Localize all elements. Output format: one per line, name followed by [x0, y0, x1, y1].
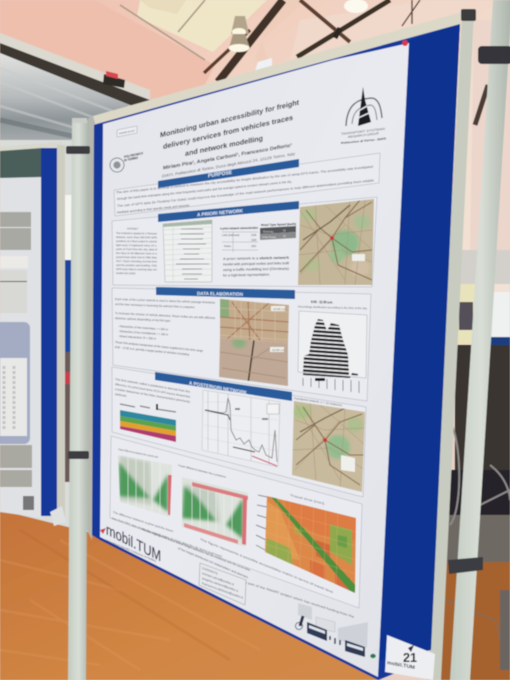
- line chart: speed profile: [202, 390, 280, 467]
- ceiling lamps: [228, 0, 368, 52]
- poster number label: mobil.TUM: [387, 660, 415, 671]
- results text: The figure represents a possible accessibility matrix in terms of travel time: [200, 537, 333, 594]
- acknowledgement text: This research is part of the SMART project which has received funding from the: [220, 572, 354, 619]
- background scene on the right: [440, 20, 510, 680]
- map: node detail bottom: 12:00 r:m: [272, 348, 285, 352]
- panel: purpose: feedback according to their specific needs and interests.: [117, 203, 190, 214]
- background: ceiling and wall: [0, 0, 510, 340]
- right frame bar of the board: [427, 14, 474, 680]
- mobil.TUM conference logo: mobil.TUM: [106, 522, 161, 565]
- dataset text: dataset, more than 350.000 GPS: [116, 236, 157, 239]
- heading: data elaboration: [156, 287, 295, 299]
- title: [160, 98, 300, 158]
- network characteristics table: [220, 226, 258, 252]
- histogram: vehicles by time of day: Recordings distribution according to the time of the day: [298, 305, 368, 310]
- results text: [112, 510, 333, 594]
- dataset text: The method is applied to a Torinese: [116, 232, 158, 235]
- title: delivery services from vehicles traces: [163, 113, 293, 151]
- dataset text: DATASET: [127, 227, 139, 231]
- data elaboration text: Each node of the a priori network is used to detect the vehicle passage timestamp: [115, 297, 215, 305]
- a posteriori text: difference of a priori travel times (FCD GPS traces) showed that: [115, 382, 190, 399]
- mobil.TUM conference logo: [100, 522, 161, 565]
- data elaboration text: - Intersection of two motorways: r = 250 m: [118, 324, 169, 332]
- data elaboration text: 8:00 - 12:30 a.m. permits a target portion of vehicles circulating: [115, 345, 189, 356]
- dataset text: [116, 227, 158, 275]
- logo: Politecnico di Torino: DI TORINO: [124, 156, 138, 162]
- network characteristics table: 1528: [251, 239, 257, 242]
- mobil.TUM conference logo: International Scientific Conference on Mobility: [106, 538, 157, 563]
- data elaboration text: - Intersection of two roundabouts: r = 100 m: [118, 329, 169, 337]
- paper id box: [117, 126, 137, 137]
- panel: results: [110, 436, 362, 608]
- panel: purpose: [114, 153, 380, 216]
- network characteristics table: A priori network characteristics: [220, 226, 258, 230]
- contact box: [199, 563, 246, 605]
- data elaboration text: These first analysis comparison of the traces registered in the time range: [115, 340, 203, 353]
- heading: a posteriori network: [155, 372, 292, 401]
- logo: Politecnico di Torino: [110, 151, 143, 172]
- floor: wood parquet: [0, 510, 382, 680]
- results text: The difference between a priori and the travel: [113, 510, 173, 533]
- a posteriori text: [115, 377, 191, 404]
- sketch network description: using a traffic modelling tool (Omnitrans): [223, 267, 289, 272]
- road type speed table: Urban Roads: [262, 236, 277, 239]
- logo: Transport Systems Research Group: [341, 87, 386, 145]
- right pole: [448, 0, 510, 680]
- dataset text: light used, if registered every 10 s,: [116, 244, 157, 247]
- data elaboration text: distance options depending on its link type:: [115, 316, 171, 323]
- colour band table: [120, 404, 176, 442]
- sketch network description: A priori network is a sketch network: [223, 256, 289, 261]
- contact box: angela.carboni@polito.it: [202, 576, 238, 593]
- icon: transport skyline: [296, 603, 368, 657]
- panel: a posteriori network: [112, 367, 368, 497]
- paper id box: PAPER ID 407: [119, 129, 136, 135]
- road type speed table: Road Type Speed [km/h]: [261, 222, 296, 227]
- network characteristics table: Links (fwd+bwd): [222, 234, 240, 237]
- road type speed table: [260, 222, 296, 240]
- affiliation: DIATI, Politecnico di Torino, Duca degli Abruzzi 24, 10129 Torino, Italy: [162, 152, 295, 178]
- logo: Politecnico di Torino: POLITECNICO: [124, 151, 143, 159]
- top frame corner cap: [461, 9, 476, 21]
- map: node detail top: 12:00 r:m: [273, 307, 286, 311]
- a posteriori text: The first network called a posteriori is derived from the: [115, 377, 190, 394]
- map: a priori network: [298, 198, 374, 286]
- poster sheet: [100, 43, 409, 677]
- left pole: [66, 118, 90, 680]
- data elaboration text: and the time necessary to traversing the selected links is computed.: [115, 302, 195, 309]
- histogram: vehicles by time of day: [298, 300, 368, 393]
- icon: green leaf: [370, 654, 376, 658]
- histogram: vehicles by time of day: 8:00 - 12:30 a.m.: [311, 300, 333, 304]
- panel: data elaboration: [112, 287, 371, 401]
- map: a posteriori network: [292, 400, 366, 492]
- data elaboration text: To increase the chance of vehicle detection, these nodes are set with different: [115, 311, 215, 320]
- heading: a priori network: A PRIORI NETWORK: [197, 208, 243, 218]
- chart: travel time matrix 1: Travel difference between the a priori and: [118, 447, 158, 459]
- neighbouring wall and backdrop left: [0, 140, 92, 540]
- network characteristics table: 1061: [251, 245, 257, 248]
- network characteristics table: 2136: [251, 234, 257, 237]
- chart: travel time matrix 2: Travel difference between the a posteriori: [178, 463, 226, 479]
- panel: purpose: through the travel time estimation along the most frequently used paths and the average speed to connect relevant zones in the city.: [117, 179, 292, 201]
- logo: Transport Systems Research Group: RESEARCH GROUP: [348, 131, 379, 139]
- dataset text: the time of all different vans in a: [116, 252, 158, 255]
- contact box: CONTACTS: [202, 566, 218, 576]
- dataset text: parts of Turin from the city, data of: [116, 248, 157, 251]
- data elaboration text: [115, 297, 215, 356]
- dataset text: GPS trace data in working days are: [116, 268, 158, 271]
- dataset text: period from April 2nd to 28th May: [116, 256, 158, 259]
- map: node detail top: [218, 297, 290, 345]
- road type speed table: 30: [283, 235, 286, 238]
- dataset text: positions of a fleet suited to vehicle: [116, 240, 158, 243]
- panel: purpose: The aim of this paper is to develop a method to measure the city accessibility for freight distribution by the use of using GPS traces. The accessibility was investigated: [116, 165, 373, 194]
- dataset text: included in the analysis.: [116, 272, 136, 275]
- title: and network modelling: [185, 133, 263, 158]
- heading: a priori network: [158, 201, 299, 222]
- left frame bar of the board: [87, 118, 94, 540]
- results text: time from GPS data shows the network matrix of zones along the city during peak hours: [112, 516, 222, 559]
- neighbouring poster panel: [0, 142, 66, 526]
- logo: Transport Systems Research Group: TRANSPORT SYSTEMS: [341, 127, 385, 136]
- map: node detail bottom: [218, 336, 290, 388]
- map caption: A posteriori network, n = 15 measures: [294, 396, 343, 407]
- logo: Transport Systems Research Group: Politecnico di Torino - DIATI: [341, 136, 386, 145]
- contact box: francesco.deflorio@polito.it: [202, 581, 243, 600]
- heading: a posteriori network: A POSTERIORI NETWORK: [189, 381, 247, 396]
- poster number label: 21: [403, 650, 417, 665]
- road type speed table: 90: [283, 230, 286, 232]
- a posteriori text: defined.: [115, 392, 127, 398]
- sketch network description: [223, 256, 289, 277]
- panel: a priori network: [112, 195, 377, 287]
- heading: purpose: [158, 159, 299, 188]
- dataset table: [163, 220, 212, 282]
- results text: Results highlight the zones where freight deliveries can be monitored and the accessible: [142, 527, 250, 572]
- chart: travel time matrix 2: [178, 463, 250, 550]
- contact box: miriam.pira@polito.it: [202, 571, 234, 587]
- dataset text: and the position and heading. Only: [116, 264, 158, 267]
- heading: data elaboration: DATA ELABORATION: [197, 291, 243, 298]
- dataset text: 2017. Each recording records time: [116, 260, 158, 263]
- heatmap: zone travel time: [256, 494, 356, 594]
- top frame bar of the board: [93, 12, 474, 124]
- heatmap: zone travel time: Travel time [min]: [290, 493, 324, 506]
- heading: purpose: PURPOSE: [208, 170, 232, 179]
- road type speed table: Motorway: [263, 230, 274, 234]
- sketch network description: model with principal nodes and links built: [223, 261, 289, 266]
- blue board: [92, 23, 460, 680]
- pin: [402, 40, 408, 46]
- sketch network description: for a high-level representation.: [223, 273, 270, 277]
- data elaboration text: - Mixed intersection: R = 250 m: [118, 334, 157, 341]
- ventilation duct and beam: [0, 33, 150, 142]
- network characteristics table: Nodes: [224, 245, 232, 248]
- panel: purpose: The use of GPS data (ie Floating Car Data) could improve the knowledge of the road network performances to help different stakeholders providing them reliable: [117, 178, 374, 208]
- a posteriori text: a better behaviour of the links characteristics previously: [115, 387, 191, 404]
- title: Monitoring urban accessibility for freight: [160, 98, 300, 139]
- poster number label: [385, 635, 435, 680]
- authors: Miriam Pira¹, Angela Carboni¹, Francesco Deflorio¹: [163, 143, 292, 171]
- chart: travel time matrix 1: [118, 448, 172, 516]
- results text: of the freight distribution for stakeholders and planners: [178, 546, 248, 580]
